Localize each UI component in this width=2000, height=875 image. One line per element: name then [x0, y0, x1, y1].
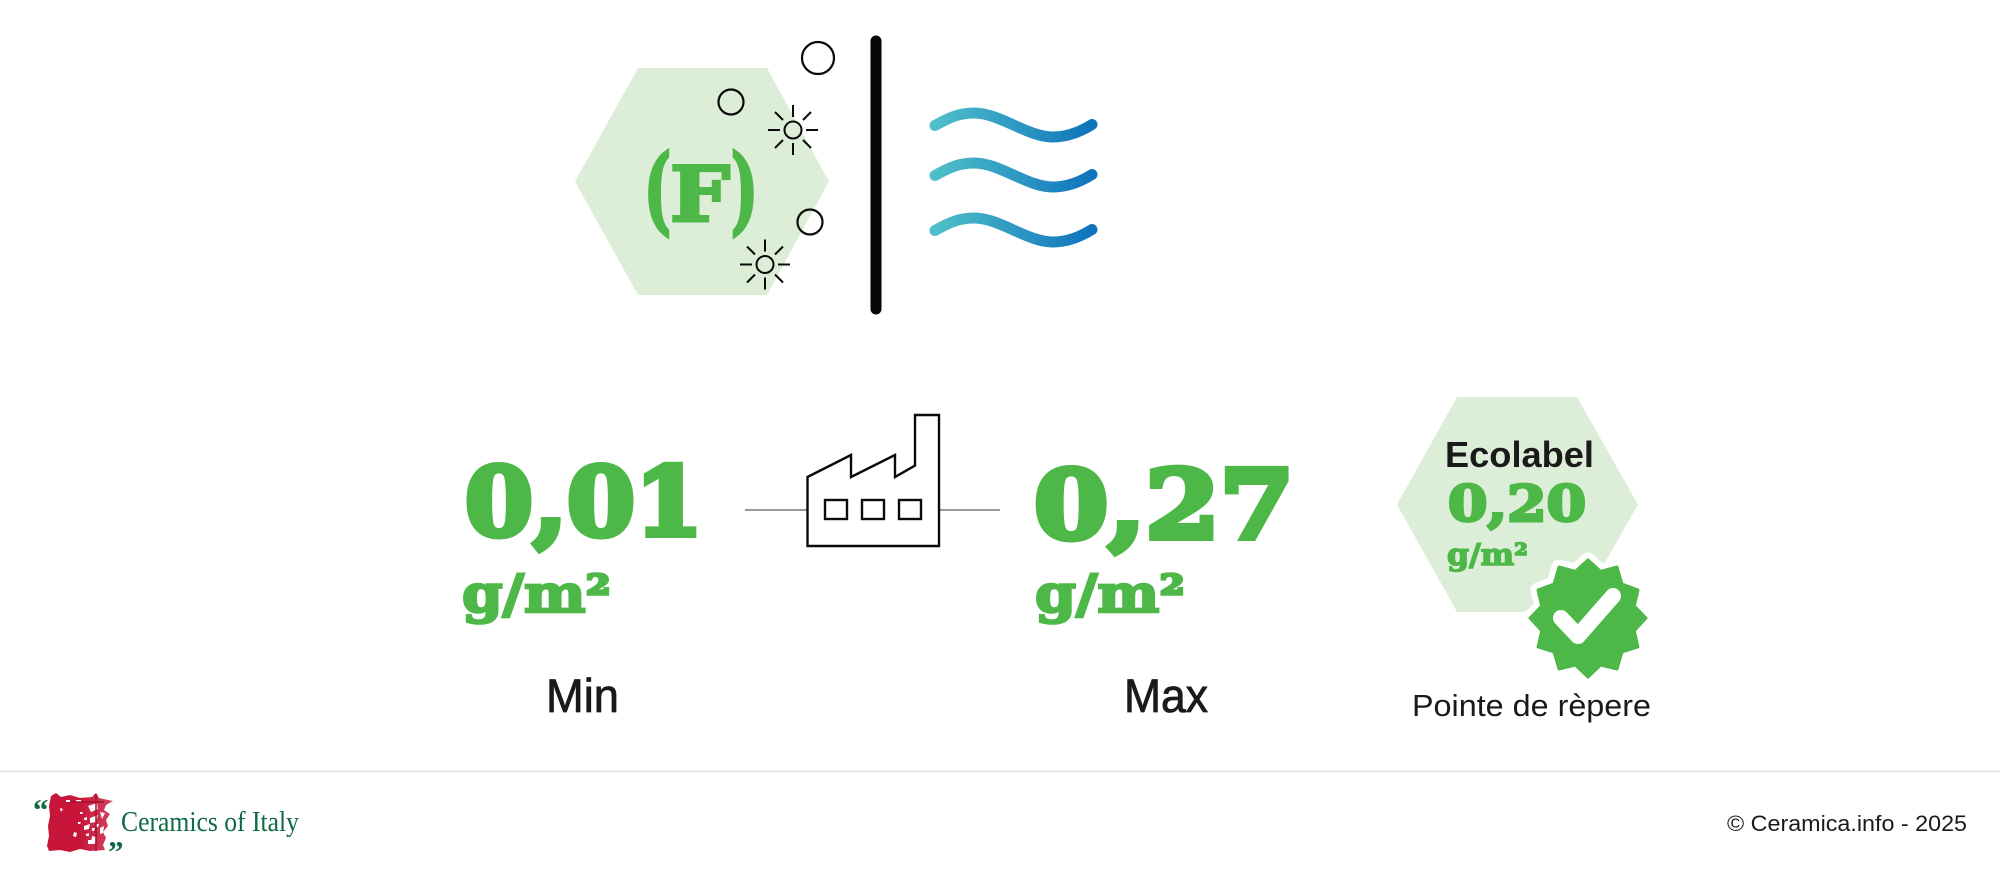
- unit g/m2: g/m²: [1447, 538, 1528, 573]
- value 0,20: 0,20: [1448, 474, 1586, 533]
- hexagon background: [1397, 397, 1638, 612]
- copyright: © Ceramica.info - 2025: [1727, 811, 1967, 836]
- ecolabel benchmark block: [1397, 397, 1651, 723]
- particles: [718, 42, 834, 234]
- icon: air waves: [935, 113, 1092, 242]
- wordmark: Ceramics of Italy: [121, 806, 299, 838]
- label Pointe de rèpere: Pointe de rèpere: [1412, 688, 1651, 723]
- icon: factory with connector lines: [745, 415, 1000, 546]
- label Max: Max: [1124, 669, 1208, 722]
- icon: check badge: [1530, 560, 1646, 677]
- formula label (F): [644, 135, 758, 245]
- formula label (F): ): [731, 135, 758, 245]
- red painted square: [47, 793, 113, 852]
- hexagon background: [575, 68, 829, 295]
- footer divider: [0, 770, 2000, 772]
- label Min: Min: [546, 669, 619, 722]
- sun particle upper: [768, 105, 818, 155]
- barrier line: [870, 41, 882, 309]
- sun particle lower: [740, 240, 790, 290]
- value 0,01: 0,01: [465, 447, 703, 558]
- icon: formaldehyde hexagon with particles: [575, 42, 834, 295]
- unit g/m2: g/m²: [462, 564, 611, 625]
- closing quote: ”: [108, 834, 124, 869]
- formula label (F): F: [670, 150, 730, 239]
- unit g/m2: g/m²: [1035, 564, 1185, 625]
- opening quote: “: [33, 792, 48, 827]
- formula label (F): (: [644, 135, 671, 245]
- max value block: [1034, 450, 1294, 722]
- value 0,27: 0,27: [1034, 450, 1294, 561]
- min value block: [462, 447, 703, 722]
- logo: Ceramics of Italy: [33, 792, 299, 869]
- heading Ecolabel: Ecolabel: [1445, 434, 1594, 475]
